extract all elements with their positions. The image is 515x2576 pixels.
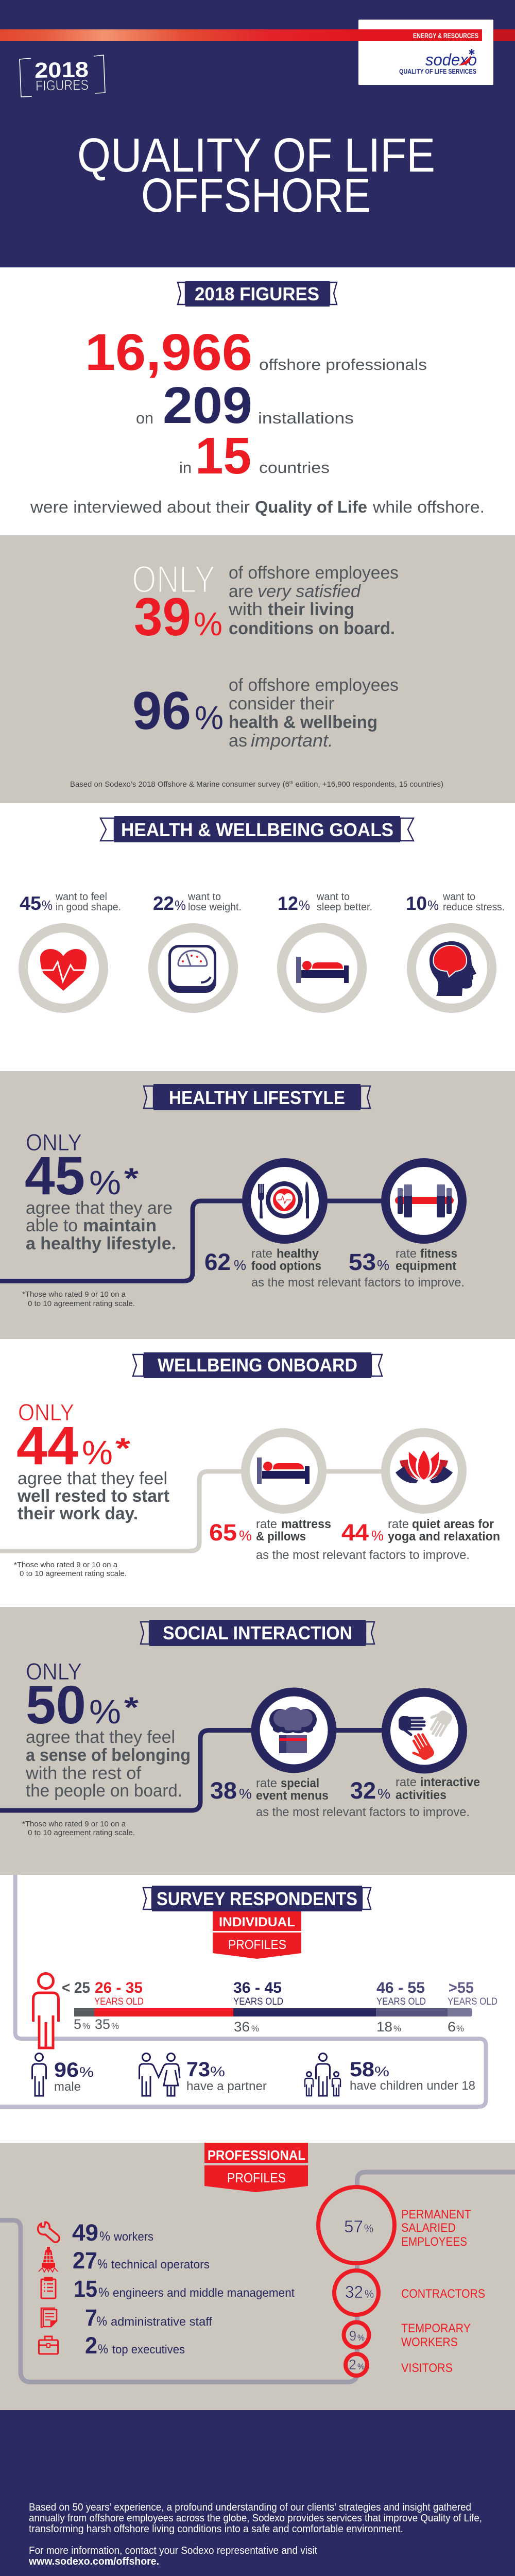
- stat: 62 percent: rate: [251, 1247, 272, 1261]
- stat: permanent salaried employees: PERMANENT: [401, 2208, 471, 2222]
- icon: scale: [168, 945, 216, 993]
- stat: technical operators: 27: [73, 2247, 97, 2274]
- stat: 39 percent: %: [194, 605, 222, 642]
- stat: 45 percent: able to: [26, 1216, 78, 1235]
- icon: bed: [245, 1432, 322, 1510]
- stat: children: [305, 2054, 475, 2096]
- stat: 53 percent: rate: [396, 1247, 417, 1261]
- stat: technical operators: %: [97, 2257, 108, 2272]
- icon: plate: [246, 1162, 323, 1240]
- chart: age distribution: YEARS OLD: [376, 1996, 426, 2007]
- stat: 62 percent: 62: [204, 1249, 231, 1275]
- heading: social interaction: [141, 1620, 374, 1646]
- goal: sleep better: 12: [278, 893, 298, 914]
- stat: 45 percent: maintain: [83, 1216, 157, 1235]
- panel: health and wellbeing goals: [0, 803, 515, 1071]
- text: about sodexo: annually from offshore employees across the globe, Sodexo provides services that improve Quality of Life,: [29, 2513, 482, 2524]
- goal: good shape: want to feel: [55, 891, 107, 903]
- stat: 38 percent: rate: [256, 1776, 277, 1790]
- panel: survey respondents: [0, 1875, 515, 2143]
- stat: administrative staff: %: [96, 2314, 107, 2329]
- stat: 62 percent: [204, 1247, 321, 1275]
- stat: 32 percent: %: [377, 1786, 390, 1802]
- panel: wellbeing onboard: [0, 1339, 515, 1607]
- stat: 50 percent: the people on board.: [26, 1781, 182, 1801]
- stat: 50 percent: ONLY: [26, 1658, 82, 1685]
- ribbon: individual profiles: [213, 1911, 301, 1959]
- stat: 53 percent: equipment: [396, 1259, 456, 1273]
- stat: visitors: [346, 2354, 453, 2376]
- chart: age distribution: YEARS OLD: [448, 1996, 497, 2007]
- stat: 39 percent: conditions on board.: [229, 619, 395, 638]
- stat: engineers: %: [98, 2285, 109, 2300]
- goal: reduce stress: want to: [442, 891, 475, 903]
- stat: children: have children under 18: [350, 2079, 475, 2093]
- heading: wellbeing onboard: WELLBEING ONBOARD: [158, 1354, 357, 1376]
- stat: partner: [139, 2054, 267, 2096]
- chart: age distribution: 26 - 35: [95, 1979, 143, 1996]
- stat: contractors: %: [365, 2287, 374, 2300]
- stat: 96 percent: %: [195, 699, 224, 736]
- goal: sleep better: want to: [316, 891, 350, 903]
- goal: good shape: 45: [20, 893, 41, 914]
- stat: workers: [38, 2219, 153, 2246]
- stat: visitors: %: [357, 2362, 365, 2371]
- stat: 65 percent: %: [239, 1528, 252, 1544]
- stat: top executives: [39, 2332, 185, 2359]
- stat: 50 percent: a sense of belonging: [26, 1745, 191, 1765]
- panel: social interaction: [0, 1607, 515, 1875]
- stat: 96 percent: important.: [251, 731, 333, 751]
- stat: 38 percent: [210, 1776, 329, 1804]
- footnote: rating scale: *Those who rated 9 or 10 on a: [22, 1820, 126, 1828]
- goal: good shape: in good shape.: [56, 902, 121, 913]
- goal: reduce stress: reduce stress.: [443, 902, 505, 913]
- goal: lose weight: want to: [187, 891, 221, 903]
- stat: 65 percent: rate: [256, 1517, 277, 1531]
- panel: professional profiles: [0, 2143, 515, 2410]
- stat: visitors: VISITORS: [401, 2361, 453, 2375]
- stat: temporary workers: [344, 2321, 471, 2349]
- chart: age distribution: < 25: [62, 1979, 90, 1996]
- icon: briefcase: [39, 2336, 58, 2354]
- ribbon: professional profiles: [204, 2143, 308, 2192]
- panel: footer: [0, 2410, 515, 2576]
- goal: sleep better: %: [299, 897, 310, 913]
- stat: professionals: [85, 324, 427, 381]
- badge: 2018 figures: 2018: [35, 57, 89, 82]
- chart: age distribution: %: [393, 2024, 401, 2033]
- stat: engineers: 15: [74, 2276, 97, 2302]
- stat: 45 percent: %: [89, 1163, 121, 1201]
- chart: age distribution: 36 - 45: [233, 1979, 282, 1996]
- icon: heart: [40, 949, 87, 991]
- goal: reduce stress: 10: [406, 893, 427, 914]
- stat: 44 percent quiet areas: [341, 1517, 500, 1546]
- stat: 44 percent: %: [82, 1433, 113, 1471]
- title: QUALITY OF LIFE: [77, 128, 435, 182]
- footnote: rating scale: 0 to 10 agreement rating scale.: [28, 1828, 135, 1837]
- stat: technical operators: technical operators: [111, 2258, 210, 2271]
- stat: top executives: %: [98, 2342, 108, 2357]
- chart: age distribution: 36: [234, 2019, 250, 2035]
- stat: 65 percent: [209, 1517, 331, 1546]
- stat: 44 percent: *: [115, 1432, 130, 1464]
- stat: temporary workers: WORKERS: [401, 2335, 458, 2349]
- stat: 44 percent quiet areas: quiet areas for: [412, 1517, 494, 1531]
- heading: health and wellbeing goals: HEALTH & WELLBEING GOALS: [121, 819, 393, 840]
- text: contact: [28, 2545, 317, 2567]
- connector line: [0, 1201, 424, 1281]
- stat: 50 percent: 50: [26, 1675, 86, 1735]
- text: factors: as the most relevant factors to improve.: [256, 1805, 470, 1819]
- stat: 50 percent: [25, 1658, 191, 1801]
- stat: top executives: top executives: [112, 2343, 185, 2356]
- text: interviewed: while offshore.: [372, 498, 485, 516]
- ribbon: individual profiles: PROFILES: [228, 1938, 286, 1952]
- stat: 38 percent: %: [239, 1786, 252, 1802]
- heading: 2018 figures: [178, 281, 337, 307]
- chart: age distribution: %: [111, 2021, 119, 2031]
- footnote: survey source: edition, +16,900 respondents, 15 countries): [293, 780, 443, 789]
- stat: technical operators: [39, 2247, 210, 2274]
- stat: workers: 49: [72, 2219, 98, 2246]
- stat: 32 percent: [350, 1775, 480, 1804]
- stat: 32 percent: interactive: [420, 1775, 480, 1789]
- footnote: rating scale: [14, 1561, 127, 1578]
- stat: children: %: [374, 2064, 389, 2079]
- stat: 53 percent: fitness: [420, 1247, 457, 1261]
- stat: children: 58: [350, 2058, 374, 2081]
- stat: 44 percent quiet areas: %: [371, 1528, 384, 1544]
- stat: workers: %: [99, 2229, 110, 2244]
- stat: countries: [179, 427, 330, 485]
- stat: 50 percent: agree that they feel: [26, 1727, 175, 1747]
- stat: 39 percent: 39: [134, 587, 191, 647]
- stat: temporary workers: 9: [349, 2328, 356, 2344]
- stat: permanent salaried employees: 57: [344, 2217, 363, 2236]
- text: interviewed: were interviewed about their: [30, 498, 250, 516]
- stat: 62 percent: food options: [251, 1259, 321, 1273]
- logo card: ENERGY & RESOURCES: [413, 31, 478, 40]
- stat: permanent salaried employees: SALARIED: [401, 2221, 456, 2235]
- chart: age distribution: 5: [74, 2016, 81, 2032]
- footnote: survey source: Based on Sodexo’s 2018 Offshore & Marine consumer survey (6: [70, 780, 290, 789]
- stat: 44 percent: well rested to start: [17, 1486, 169, 1506]
- badge: 2018 figures: [20, 55, 105, 97]
- connector line: [0, 2172, 515, 2382]
- stat: 65 percent: & pillows: [256, 1530, 306, 1544]
- stat: partner: 73: [186, 2058, 210, 2081]
- ribbon: professional profiles: PROFESSIONAL: [208, 2147, 305, 2163]
- footnote: rating scale: 0 to 10 agreement rating scale.: [28, 1299, 135, 1308]
- stat: 39 percent: their living: [268, 600, 354, 619]
- stat: 39 percent: of offshore employees: [229, 563, 399, 583]
- stat: permanent salaried employees: EMPLOYEES: [401, 2235, 467, 2249]
- stat: 32 percent: activities: [396, 1788, 447, 1802]
- heading: social interaction: SOCIAL INTERACTION: [163, 1622, 352, 1643]
- stat: male: male: [54, 2080, 81, 2094]
- stat: 38 percent: special: [281, 1776, 319, 1790]
- stat: 45 percent: a healthy lifestyle.: [26, 1234, 176, 1253]
- connector line: [0, 1875, 486, 2107]
- stat: 62 percent: healthy: [277, 1247, 319, 1261]
- stat: 62 percent: %: [234, 1257, 246, 1273]
- stat: 44 percent quiet areas: 44: [341, 1519, 369, 1546]
- header red stripe: [0, 29, 515, 41]
- footnote: rating scale: 0 to 10 agreement rating scale.: [20, 1569, 127, 1578]
- icon: family: [305, 2054, 340, 2096]
- stat: 96 percent: [132, 675, 399, 751]
- stat: 32 percent: rate: [396, 1775, 417, 1789]
- stat: 39 percent: with: [228, 600, 263, 619]
- chart: age distribution: 35: [95, 2016, 110, 2032]
- stat: 50 percent: %: [89, 1692, 121, 1731]
- panel: key percentages: [0, 535, 515, 803]
- stat: 44 percent: their work day.: [18, 1504, 138, 1523]
- chart: age distribution: YEARS OLD: [94, 1996, 144, 2007]
- stat: 96 percent: of offshore employees: [229, 675, 399, 695]
- chart: age distribution: 46 - 55: [376, 1979, 425, 1996]
- chart: age distribution: %: [251, 2024, 259, 2033]
- stat: countries: 15: [195, 427, 251, 485]
- stat: 44 percent: ONLY: [18, 1399, 74, 1426]
- stat: 96 percent: as: [229, 731, 247, 751]
- chart: age distribution: 18: [376, 2019, 392, 2035]
- logo card: sodexo: [425, 50, 477, 69]
- stat: countries: in: [179, 459, 192, 477]
- text: contact: For more information, contact your Sodexo representative and visit: [29, 2545, 317, 2556]
- stat: 96 percent: health & wellbeing: [229, 713, 377, 732]
- text: about sodexo: transforming harsh offshore living conditions into a safe and comfortable environment.: [29, 2523, 403, 2535]
- goal: reduce stress: [406, 891, 505, 1008]
- icon: oil derrick: [39, 2247, 58, 2272]
- stat: professionals: 16,966: [85, 324, 252, 381]
- stat: 65 percent: 65: [209, 1519, 237, 1546]
- stat: permanent salaried employees: %: [364, 2222, 373, 2235]
- panel: healthy lifestyle: [0, 1071, 515, 1339]
- stat: temporary workers: %: [357, 2333, 365, 2343]
- title: [77, 128, 435, 222]
- goal: good shape: [20, 891, 121, 1008]
- stat: professionals: offshore professionals: [259, 355, 427, 374]
- stat: contractors: CONTRACTORS: [401, 2287, 485, 2301]
- stat: 44 percent: [16, 1399, 169, 1523]
- icon: red person: [33, 1973, 59, 2048]
- icon: wrench: [38, 2222, 59, 2242]
- icon: document: [41, 2308, 57, 2327]
- heading: survey respondents: SURVEY RESPONDENTS: [157, 1888, 357, 1909]
- icon: chef hat: [255, 1692, 332, 1769]
- badge: 2018 figures: FIGURES: [36, 77, 89, 94]
- stat: 53 percent: %: [377, 1257, 389, 1273]
- goal: reduce stress: %: [427, 897, 439, 913]
- stat: countries: countries: [259, 459, 330, 477]
- stat: 32 percent: 32: [350, 1777, 376, 1804]
- stat: 39 percent: [132, 558, 399, 647]
- stat: 45 percent: ONLY: [26, 1129, 82, 1156]
- stat: 45 percent: [25, 1129, 176, 1253]
- stat: 44 percent quiet areas: yoga and relaxation: [388, 1530, 500, 1544]
- stat: engineers: [41, 2276, 295, 2302]
- stat: installations: installations: [258, 409, 354, 427]
- chart: age distribution: %: [456, 2024, 464, 2033]
- icon: head with brain: [430, 941, 476, 996]
- stat: top executives: 2: [85, 2332, 97, 2359]
- footnote: rating scale: *Those who rated 9 or 10 on a: [22, 1290, 126, 1299]
- heading: healthy lifestyle: [144, 1084, 370, 1110]
- stat: 45 percent: 45: [25, 1146, 85, 1206]
- text: interviewed: Quality of Life: [255, 498, 367, 516]
- stat: 45 percent: agree that they are: [26, 1198, 173, 1218]
- footnote: rating scale: *Those who rated 9 or 10 on a: [14, 1561, 118, 1569]
- stat: 96 percent: 96: [132, 681, 191, 741]
- stat: 39 percent: ONLY: [132, 558, 215, 601]
- stat: administrative staff: administrative staff: [111, 2315, 213, 2328]
- stat: male: 96: [54, 2059, 79, 2081]
- text: interviewed: [30, 498, 485, 516]
- stat: 50 percent: *: [124, 1691, 139, 1723]
- chart: age distribution: >55: [449, 1979, 474, 1996]
- stat: installations: on: [136, 409, 153, 427]
- text: about sodexo: Based on 50 years’ experience, a profound understanding of our clients’ strategies and insight gathered: [29, 2502, 471, 2513]
- stat: contractors: [334, 2270, 485, 2315]
- icon: lotus: [385, 1432, 462, 1510]
- stat: 44 percent quiet areas: rate: [388, 1517, 409, 1531]
- chart: age distribution: %: [82, 2021, 90, 2031]
- text: factors: as the most relevant factors to improve.: [256, 1548, 470, 1562]
- icon: clipboard: [41, 2278, 56, 2298]
- stat: 65 percent: mattress: [281, 1517, 331, 1531]
- stat: 38 percent: event menus: [256, 1789, 329, 1803]
- footnote: survey source: th: [289, 780, 293, 785]
- stat: partner: %: [210, 2064, 225, 2079]
- icon: man: [32, 2054, 46, 2096]
- chart: age distribution: 6: [448, 2019, 456, 2035]
- stat: 44 percent: agree that they feel: [18, 1469, 167, 1488]
- panel: 2018 figures: [0, 267, 515, 535]
- title: OFFSHORE: [141, 168, 371, 222]
- chart: age distribution: YEARS OLD: [233, 1996, 283, 2007]
- goal: lose weight: [153, 891, 242, 1008]
- stat: administrative staff: [41, 2304, 213, 2331]
- heading: healthy lifestyle: HEALTHY LIFESTYLE: [169, 1087, 345, 1108]
- stat: workers: workers: [113, 2230, 153, 2243]
- goal: sleep better: sleep better.: [317, 902, 372, 913]
- stat: administrative staff: 7: [85, 2304, 97, 2331]
- text: factors: as the most relevant factors to improve.: [251, 1276, 465, 1290]
- stat: male: [32, 2054, 94, 2096]
- stat: installations: 209: [163, 377, 252, 434]
- goal: sleep better: [278, 891, 372, 1008]
- footnote: rating scale: [22, 1290, 135, 1308]
- ribbon: professional profiles: PROFILES: [227, 2170, 286, 2185]
- logo card: QUALITY OF LIFE SERVICES: [399, 67, 476, 75]
- connector line: [0, 1471, 424, 1551]
- ribbon: individual profiles: INDIVIDUAL: [219, 1915, 295, 1929]
- icon: sodexo star: [469, 49, 474, 55]
- goal: good shape: %: [42, 897, 53, 913]
- text: contact: www.sodexo.com/offshore.: [28, 2556, 159, 2567]
- stat: 50 percent: with the rest of: [25, 1764, 142, 1783]
- icon: hands: [386, 1692, 462, 1769]
- stat: contractors: 32: [345, 2282, 363, 2301]
- stat: male: %: [79, 2064, 94, 2080]
- panel: header: [0, 0, 515, 267]
- heading: wellbeing onboard: [133, 1352, 382, 1378]
- icon: couple: [139, 2054, 180, 2096]
- stat: 96 percent: consider their: [229, 694, 334, 714]
- stat: 39 percent: very satisfied: [258, 582, 361, 601]
- stat: temporary workers: TEMPORARY: [401, 2321, 471, 2335]
- text: about sodexo: [29, 2502, 482, 2535]
- goal: lose weight: lose weight.: [188, 902, 242, 913]
- stat: 38 percent: 38: [210, 1777, 237, 1804]
- connector line: [0, 1730, 424, 1810]
- stat: installations: [136, 377, 354, 434]
- stat: partner: have a partner: [186, 2079, 267, 2093]
- icon: bed: [296, 957, 349, 983]
- stat: 53 percent: [349, 1247, 457, 1275]
- heading: 2018 figures: 2018 FIGURES: [195, 283, 319, 304]
- icon: sodexo swoosh: [458, 55, 471, 65]
- stat: 45 percent: *: [124, 1162, 139, 1194]
- footnote: rating scale: [22, 1820, 135, 1837]
- chart: age distribution: [62, 1979, 497, 2035]
- goal: lose weight: 22: [153, 893, 174, 914]
- icon: dumbbell: [385, 1162, 462, 1240]
- stat: 44 percent: 44: [16, 1416, 78, 1476]
- stat: permanent salaried employees: [318, 2187, 471, 2263]
- stat: visitors: 2: [349, 2357, 356, 2372]
- stat: 53 percent: 53: [349, 1249, 376, 1275]
- stat: 39 percent: are: [229, 582, 253, 601]
- stat: engineers: engineers and middle management: [113, 2286, 295, 2299]
- logo card: [358, 20, 493, 85]
- goal: lose weight: %: [175, 897, 186, 913]
